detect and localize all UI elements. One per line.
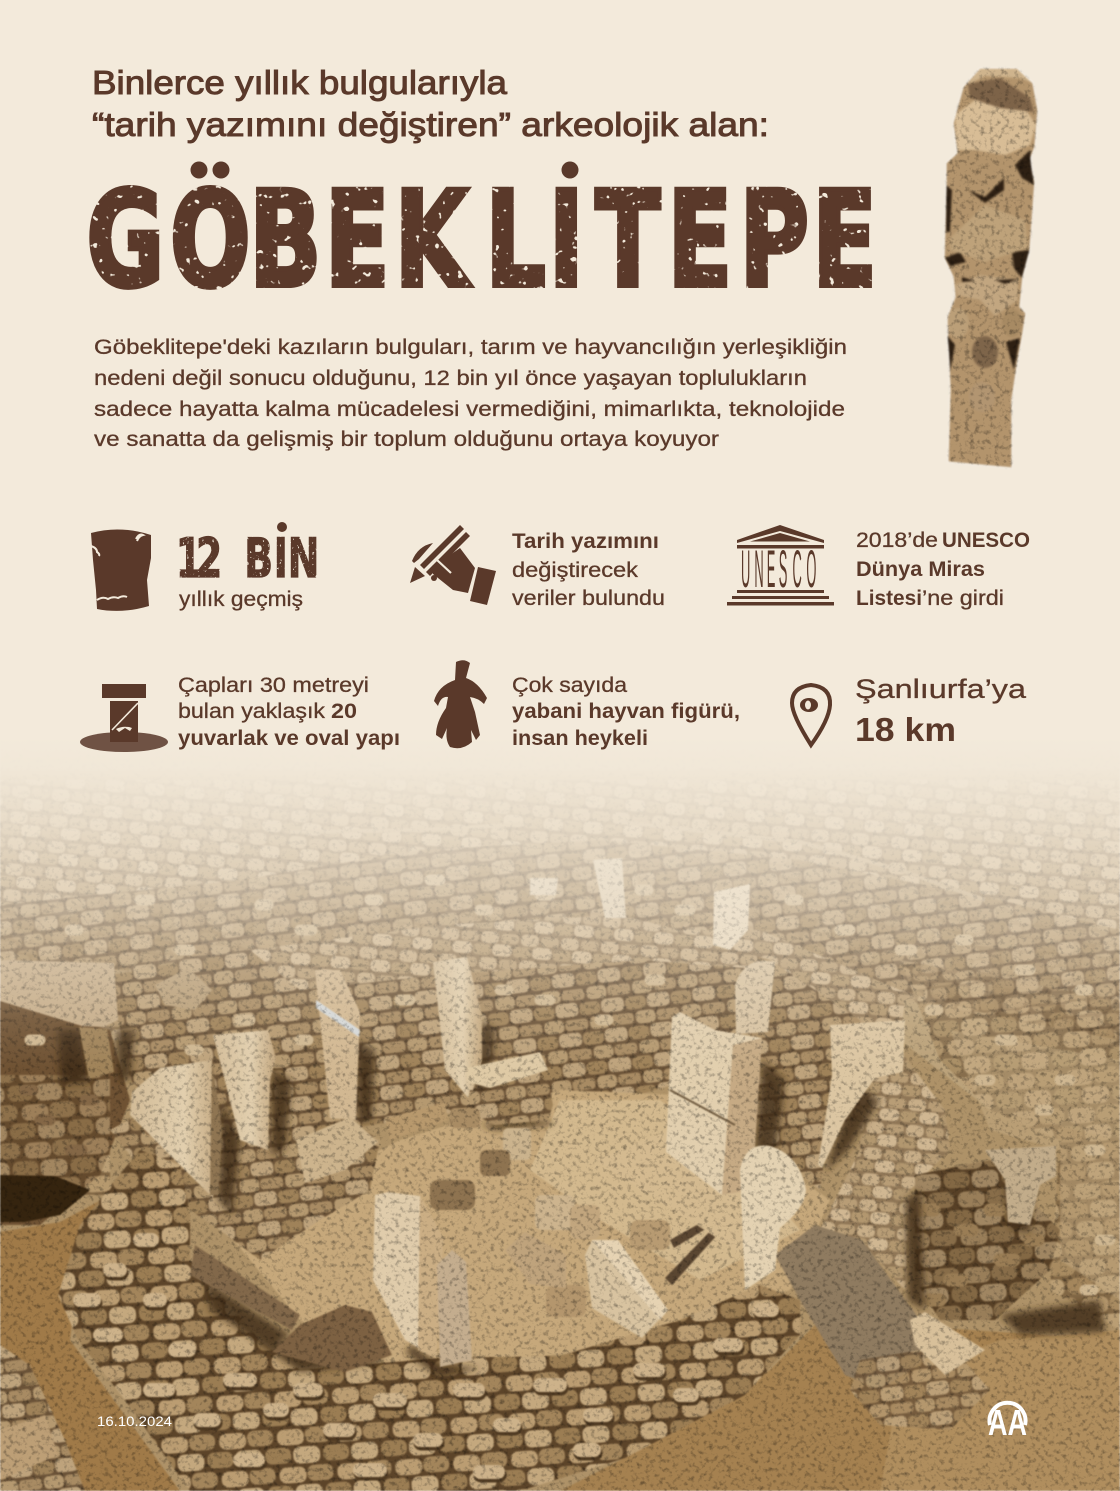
earth and dark stones left [0, 1000, 130, 1225]
scattered stones centre [430, 1108, 670, 1317]
icon: map pin [792, 685, 830, 745]
statue head cap light [967, 68, 1033, 85]
big number: 12 BİN [176, 527, 319, 590]
stone kerb [385, 1103, 448, 1140]
dark pit left [0, 1175, 90, 1222]
statue torso light [950, 205, 1028, 262]
foreground dirt left [0, 1190, 180, 1491]
block left back [155, 968, 212, 1010]
stat: yuvarlak yapılar: yuvarlak ve oval yapı [178, 727, 400, 750]
boulder centre [505, 1232, 566, 1288]
heading: Binlerce yıllık bulgularıyla [92, 64, 508, 101]
text: Tarih yazımını [512, 530, 659, 553]
intro paragraph: nedeni değil sonucu olduğunu, 12 bin yıl önce yaşayan toplulukların [94, 367, 807, 390]
T pillar right [818, 1020, 905, 1168]
right curved stone wall [820, 1050, 950, 1290]
intro paragraph: sadece hayatta kalma mücadelesi vermediğini, mimarlıkta, teknolojide [94, 398, 845, 421]
pillar with strap [315, 970, 360, 1120]
icon: hand writing [410, 525, 496, 605]
stat: figürler [434, 660, 740, 750]
stat: tarih yazımı [410, 525, 665, 610]
stat: UNESCO: ’ne girdi [922, 587, 1004, 610]
text: Çapları 30 metreyi [178, 674, 369, 697]
dark boulder [272, 1305, 392, 1372]
stat: UNESCO: Dünya Miras [856, 558, 985, 581]
text: Çok sayıda [512, 674, 627, 697]
round slab on wall [465, 1080, 553, 1125]
stat: Şanlıurfa [792, 674, 1027, 748]
heading: “tarih yazımını değiştiren” arkeolojik alan: [92, 106, 769, 143]
right inner dark wall [750, 1070, 830, 1190]
back wall left [110, 925, 880, 1170]
boulder right [910, 1312, 985, 1375]
T pillar far right [985, 1146, 1056, 1225]
stat: yuvarlak yapılar [80, 674, 400, 752]
wood sticks [665, 1198, 747, 1285]
rubble mound left ring [58, 1150, 800, 1491]
T pillar back right [735, 961, 775, 1034]
statue arms and faces [955, 275, 1018, 316]
stat: tarih yazımı: değiştirecek [512, 559, 639, 582]
stat: figürler: yabani hayvan figürü, [512, 700, 740, 723]
stat: UNESCO: UNESCO [942, 529, 1030, 552]
pillar front left [130, 1060, 220, 1198]
caption: yıllık geçmiş [179, 588, 303, 611]
statue shadows [945, 150, 1034, 372]
text: 2018’de [856, 529, 938, 552]
photo: excavated stone circles of Göbeklitepe [0, 735, 1120, 1491]
leaning pillar [585, 1240, 668, 1338]
inner floor [225, 1090, 830, 1370]
central giant pillar [666, 1012, 762, 1195]
slab base under central pillar [596, 1130, 780, 1255]
icon: stone fragment [91, 529, 151, 611]
stat: UNESCO: Listesi [856, 587, 922, 610]
stat: UNESCO [727, 525, 1030, 610]
stat: yuvarlak yapılar: bulan yaklaşık [178, 700, 326, 723]
stat: Şanlıurfa: 18 km [855, 711, 956, 748]
left inner wall [110, 1085, 380, 1260]
text: Şanlıurfa’ya [855, 674, 1027, 704]
gravel mound [775, 1225, 925, 1390]
right niche dark wall [915, 1160, 1060, 1320]
stat: 12 bin yıllık geçmiş [91, 516, 319, 611]
upper rubble lit stones [30, 880, 1110, 1290]
irregular stones: lit [80, 1240, 772, 1472]
statue head dark top [968, 78, 1034, 112]
stat: yuvarlak yapılar: 20 [331, 700, 357, 723]
rock patch lower right [850, 1345, 990, 1430]
tall pillar back [433, 957, 482, 1100]
upper-right lit rubble [900, 960, 1120, 1330]
stat: figürler: insan heykeli [512, 727, 648, 750]
icon: UNESCO temple [727, 525, 834, 606]
weathered stele [437, 1250, 472, 1367]
upper wooden walkway [290, 822, 985, 900]
stat: tarih yazımı: veriler bulundu [512, 587, 665, 610]
statue photo [944, 68, 1038, 468]
contact shadows [58, 1020, 1105, 1378]
logo: AA: AA [988, 1402, 1027, 1443]
upper rubble field [0, 780, 1120, 1040]
heading [92, 64, 769, 143]
date: 16.10.2024 [97, 1414, 173, 1429]
fade overlay [0, 735, 1120, 1070]
irregular stones: shadows [81, 1243, 773, 1475]
ground base [0, 740, 1120, 1491]
bottom left corner wall [0, 1345, 85, 1491]
title: Göbeklitepe: GÖBEKLİTEPE [86, 162, 877, 318]
icon: animal figurine [434, 660, 487, 748]
foreground dirt right [560, 1320, 1120, 1491]
rounded T-pillar centre right [740, 1146, 806, 1290]
tall stele front [373, 1192, 443, 1358]
icon: T pillar on disc [80, 684, 168, 752]
back wall top lit band [250, 915, 770, 990]
slab pointing in left ring [190, 1245, 300, 1330]
statue head light [955, 100, 1036, 155]
pillar left two [213, 1030, 276, 1150]
intro paragraph: Göbeklitepe'deki kazıların bulguları, tarım ve hayvancılığın yerleşikliğin [94, 336, 847, 359]
upper pillars [713, 884, 750, 950]
icon: UNESCO temple: UNESCO [741, 540, 816, 599]
T pillar far left top [0, 960, 118, 1027]
dirt band right [900, 1000, 1120, 1140]
slab large left centre [296, 1117, 378, 1183]
upper enclosure wall [0, 840, 1120, 1050]
intro paragraph: ve sanatta da gelişmiş bir toplum olduğunu ortaya koyuyor [94, 428, 719, 451]
intro paragraph [94, 336, 847, 451]
